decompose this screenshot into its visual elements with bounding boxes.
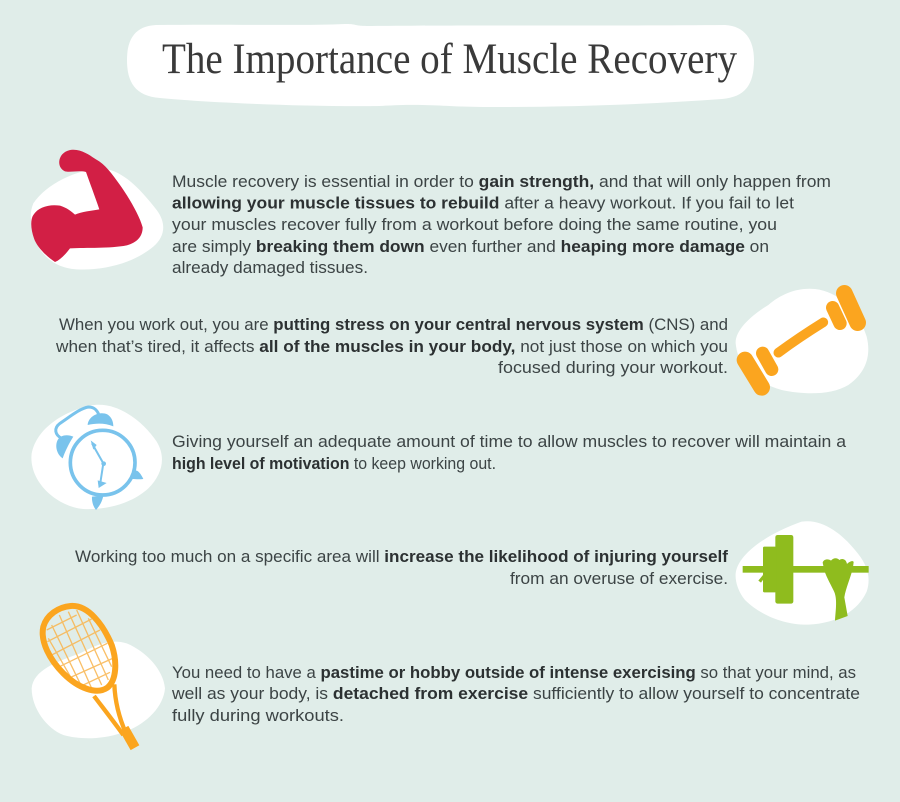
text block: pastime or hobby: fully during workouts. [172, 706, 344, 725]
text block: motivation [172, 432, 847, 473]
text block: pastime or hobby: well as your body, is detached from exercise sufficiently to allow yourself to concentrate [171, 684, 860, 703]
text block: motivation: Giving yourself an adequate amount of time to allow muscles to recover will maintain a [172, 432, 847, 451]
text block: intro on muscle recovery: your muscles recover fully from a workout before doing the same routine, you [172, 215, 777, 234]
text block: central nervous system: focused during your workout. [498, 358, 728, 377]
text block: intro on muscle recovery: Muscle recovery is essential in order to gain strength, and that will only happen from [172, 172, 831, 191]
text block: intro on muscle recovery [172, 172, 831, 277]
text block: injury: Working too much on a specific area will increase the likelihood of injuring yourself [75, 547, 728, 566]
icon: barbell with hand [736, 521, 869, 625]
text block: pastime or hobby [171, 663, 860, 725]
text block: central nervous system [55, 315, 728, 377]
text block: intro on muscle recovery: allowing your muscle tissues to rebuild after a heavy workout. If you fail to let [172, 194, 794, 212]
text block: injury: from an overuse of exercise. [510, 569, 728, 588]
text block: central nervous system: when that’s tired, it affects all of the muscles in your body, not just those on which you [55, 337, 728, 356]
text block: pastime or hobby: You need to have a pastime or hobby outside of intense exercising so that your mind, as [172, 663, 856, 682]
text block: motivation: high level of motivation to keep working out. [172, 454, 496, 473]
icon: flexed arm [31, 150, 163, 269]
text block: injury [75, 547, 728, 588]
title banner [127, 24, 754, 107]
text block: intro on muscle recovery: already damaged tissues. [172, 258, 368, 277]
text block: central nervous system: When you work out, you are putting stress on your central nervous system (CNS) and [59, 315, 728, 334]
text block: intro on muscle recovery: are simply breaking them down even further and heaping more damage on [172, 237, 769, 256]
icon: dumbbell [736, 289, 868, 393]
title text: The Importance of Muscle Recovery [162, 36, 737, 83]
icon: tennis racquet [32, 606, 165, 748]
icon: alarm clock [31, 405, 162, 510]
